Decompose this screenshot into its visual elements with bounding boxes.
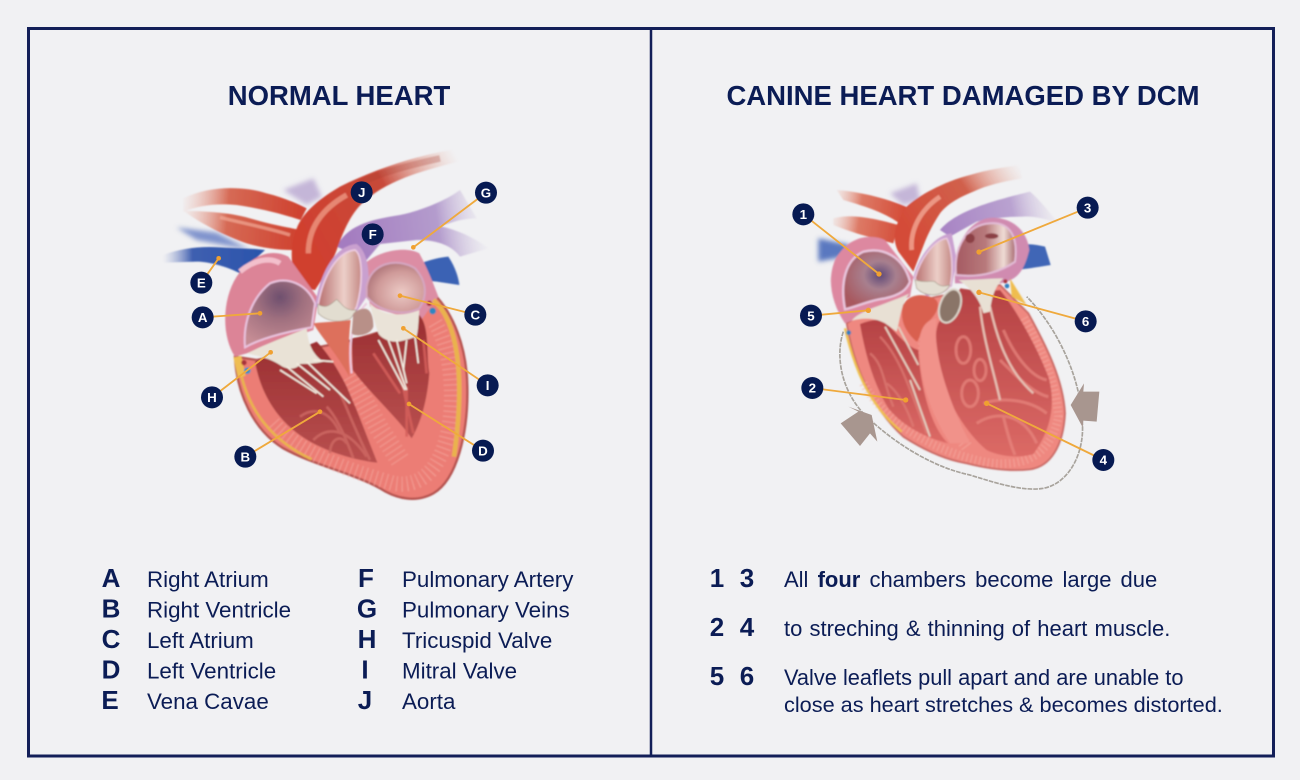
legend: chamber and vessel key bbox=[101, 563, 574, 715]
callouts: numbers: 4 bbox=[1100, 453, 1108, 468]
row: valve leaflets: 5 bbox=[710, 661, 724, 691]
aortic outflow bbox=[902, 295, 938, 342]
row: chambers enlarge: 3 bbox=[740, 563, 754, 593]
mitral valve bbox=[370, 303, 419, 390]
callouts: numbers: 3 bbox=[1084, 200, 1091, 215]
pulmonary trunk chamber bbox=[318, 250, 361, 319]
row: muscle thinning bbox=[710, 612, 1170, 642]
row: valve leaflets: close as heart stretches & becomes distorted. bbox=[784, 692, 1223, 717]
dashed previous outline bbox=[840, 297, 1083, 489]
right atrium chamber bbox=[245, 281, 315, 347]
legend: chamber and vessel key: I bbox=[361, 654, 369, 684]
pulmonic valve bbox=[318, 299, 357, 321]
callouts: letters: B bbox=[241, 449, 251, 464]
row: valve leaflets bbox=[710, 661, 1223, 717]
arrow: right pressure bbox=[1071, 383, 1099, 427]
septum bbox=[919, 318, 970, 443]
coronary vessels bbox=[846, 279, 1009, 335]
legend: chamber and vessel key: B bbox=[102, 594, 120, 624]
coronary vessels bbox=[241, 301, 436, 374]
pulmonary trunk chamber bbox=[915, 238, 952, 294]
callouts: numbers: 1 bbox=[800, 207, 808, 222]
callouts: letters: J bbox=[358, 185, 365, 200]
callouts: numbers bbox=[792, 197, 1114, 471]
row: valve leaflets: 6 bbox=[740, 661, 754, 691]
callouts: letters: G bbox=[481, 185, 491, 200]
left ventricle cavity bbox=[352, 315, 429, 438]
legend: chamber and vessel key: F bbox=[358, 563, 374, 593]
legend: chamber and vessel key: E bbox=[101, 685, 119, 715]
row: chambers enlarge bbox=[710, 563, 1157, 593]
legend: chamber and vessel key: Pulmonary Veins bbox=[402, 598, 570, 622]
row: valve leaflets: Valve leaflets pull apart and are unable to bbox=[784, 665, 1183, 690]
aortic valve bbox=[935, 286, 965, 326]
panel: normal heart bbox=[101, 80, 574, 715]
legend: chamber and vessel key: D bbox=[102, 654, 120, 684]
callouts: letters: F bbox=[369, 227, 377, 242]
left atrium chamber bbox=[956, 223, 1016, 276]
right ventricle cavity bbox=[255, 342, 377, 463]
legend: chamber and vessel key: G bbox=[357, 594, 377, 624]
legend: chamber and vessel key: C bbox=[102, 624, 121, 654]
vessels bbox=[818, 165, 1060, 272]
callouts: numbers: 5 bbox=[807, 308, 815, 323]
heading: damaged heart: CANINE HEART DAMAGED BY DCM bbox=[726, 80, 1200, 111]
callouts: letters: A bbox=[198, 310, 208, 325]
heart wall bbox=[847, 285, 1065, 470]
wall striations bbox=[863, 317, 1058, 464]
legend: chamber and vessel key: Right Atrium bbox=[147, 567, 269, 592]
left atrium chamber bbox=[367, 263, 425, 312]
row: chambers enlarge: All four chambers become large due bbox=[784, 567, 1157, 592]
legend: chamber and vessel key: Mitral Valve bbox=[402, 658, 517, 684]
legend: what changes in DCM bbox=[710, 563, 1223, 717]
right ventricle cavity bbox=[860, 320, 948, 443]
illustration: normal heart cross-section bbox=[163, 148, 499, 499]
illustration: enlarged heart cross-section bbox=[792, 165, 1114, 489]
atria outer bbox=[831, 237, 913, 323]
legend: chamber and vessel key: J bbox=[358, 685, 372, 715]
legend: chamber and vessel key: Right Ventricle bbox=[147, 598, 291, 622]
mitral valve bbox=[958, 278, 1003, 313]
callouts: letters: I bbox=[486, 378, 490, 393]
outflow tract bbox=[313, 320, 351, 377]
row: muscle thinning: 4 bbox=[740, 612, 755, 642]
septum lining bbox=[350, 303, 367, 373]
fat band bbox=[845, 278, 1027, 432]
callouts: letters: D bbox=[478, 443, 488, 458]
legend: chamber and vessel key: Left Atrium bbox=[147, 628, 254, 653]
arrow: left pressure bbox=[841, 407, 877, 446]
legend: chamber and vessel key: A bbox=[102, 563, 121, 593]
row: chambers enlarge: 1 bbox=[710, 563, 724, 593]
callouts: letters: H bbox=[207, 390, 217, 405]
callouts: letters: C bbox=[471, 307, 481, 322]
legend: chamber and vessel key: Tricuspid Valve bbox=[402, 628, 552, 653]
vessels bbox=[163, 148, 488, 290]
pulmonic valve bbox=[915, 280, 950, 295]
left ventricle cavity bbox=[936, 288, 1052, 456]
callouts: numbers: 6 bbox=[1082, 314, 1089, 329]
legend: chamber and vessel key: Pulmonary Artery bbox=[402, 567, 574, 592]
right atrium chamber bbox=[843, 250, 910, 309]
heart wall bbox=[235, 293, 467, 499]
legend: chamber and vessel key: Aorta bbox=[402, 689, 456, 714]
tricuspid valve bbox=[852, 293, 910, 332]
row: muscle thinning: 2 bbox=[710, 612, 724, 642]
legend: chamber and vessel key: H bbox=[358, 624, 376, 654]
tricuspid valve bbox=[247, 328, 350, 403]
panel: canine heart damaged by DCM bbox=[710, 80, 1223, 717]
callouts: letters bbox=[190, 181, 499, 468]
atria outer bbox=[225, 253, 318, 357]
conduction fat band bbox=[237, 300, 459, 459]
callouts: numbers: 2 bbox=[809, 381, 816, 396]
legend: chamber and vessel key: Left Ventricle bbox=[147, 658, 276, 684]
callouts: letters: E bbox=[197, 275, 206, 290]
row: muscle thinning: to streching & thinning of heart muscle. bbox=[784, 616, 1170, 641]
heading: normal heart: NORMAL HEART bbox=[228, 80, 450, 111]
legend: chamber and vessel key: Vena Cavae bbox=[147, 689, 269, 714]
wall striations bbox=[273, 320, 452, 484]
